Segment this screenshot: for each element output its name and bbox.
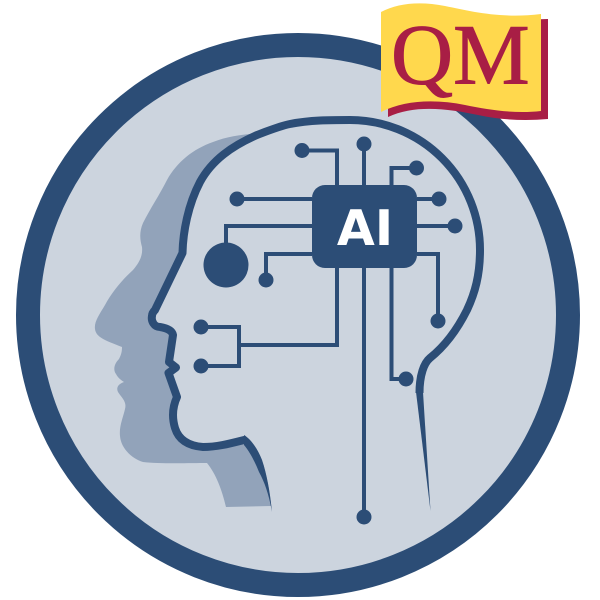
QM flag logo: QM [391,6,530,102]
head interior [152,120,480,512]
head shadow silhouette [95,133,300,507]
AI chip: AI [337,200,393,257]
head profile outline [152,120,480,512]
QM flag logo [381,3,548,120]
AI chip [312,185,417,268]
circuit node dots [194,136,462,524]
circuit traces [201,144,455,517]
